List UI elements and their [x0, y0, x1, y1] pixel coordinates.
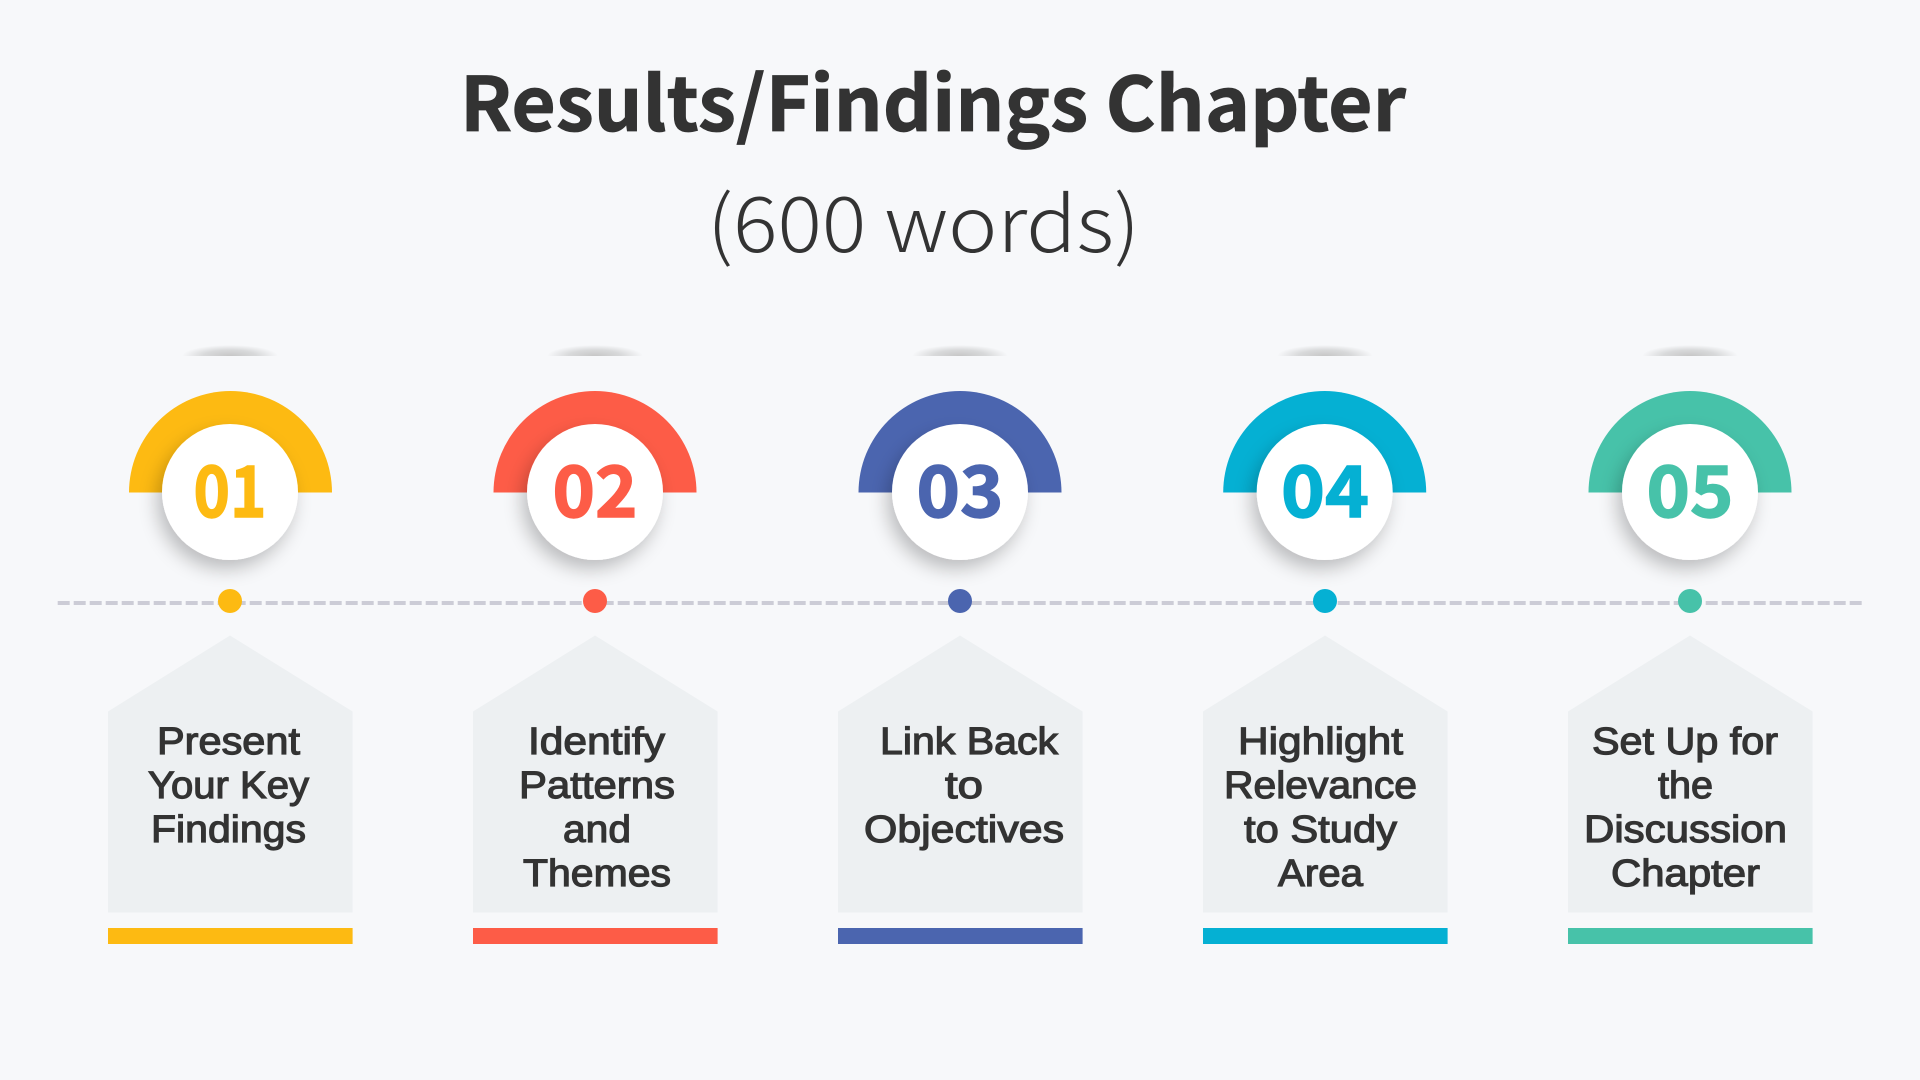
card 5 text: Set Up for [1592, 721, 1778, 763]
card 5 text: Discussion [1584, 809, 1787, 851]
dot 5 [1678, 589, 1702, 613]
dot 3 [948, 589, 972, 613]
card 4 text [1224, 721, 1417, 895]
circle 3 [892, 424, 1028, 560]
card 1 text [148, 721, 309, 851]
arc 3 [858, 391, 1062, 492]
card 3 text: to [945, 765, 983, 807]
card 4 text: to Study [1244, 809, 1397, 851]
number 05: 05 [1646, 436, 1734, 538]
number 03: 03 [916, 436, 1004, 538]
timeline dashed line [58, 601, 1862, 605]
card 4 [1203, 636, 1448, 912]
circle 2 [527, 424, 663, 560]
shadow blob 5 [1648, 346, 1732, 356]
shadow blob 1 [188, 346, 272, 356]
card 5 text [1584, 721, 1787, 895]
card 1 text: Your Key [148, 765, 309, 807]
number 02: 02 [552, 436, 638, 538]
card 1 text: Present [157, 721, 300, 763]
card 2 [473, 636, 718, 912]
title: Results/Findings Chapter [460, 44, 1406, 153]
card 4 text: Highlight [1238, 721, 1403, 763]
card 1 [108, 636, 353, 912]
arc 2 [494, 391, 696, 492]
card 4 text: Relevance [1224, 765, 1417, 807]
dot 1 [218, 589, 242, 613]
bar 3 [838, 928, 1083, 944]
card 2 text: Patterns [519, 765, 675, 807]
circle 5 [1622, 424, 1758, 560]
bar 5 [1568, 928, 1813, 944]
step 4 [1203, 345, 1448, 944]
card 2 text: Themes [523, 853, 671, 895]
card 3 [838, 636, 1083, 912]
arc 1 [129, 391, 332, 492]
step 1 [108, 345, 353, 944]
shadow blob 2 [552, 346, 638, 356]
dot 4 [1313, 589, 1337, 613]
card 2 text: and [563, 809, 631, 851]
card 5 [1568, 636, 1813, 912]
circle 1 [162, 424, 298, 560]
circle 4 [1257, 424, 1393, 560]
card 3 text: Link Back [880, 721, 1059, 763]
step 2 [473, 345, 718, 944]
shadow blob 4 [1282, 346, 1368, 356]
number 04: 04 [1281, 436, 1369, 538]
arc 5 [1588, 391, 1792, 492]
card 2 text [519, 721, 675, 895]
bar 4 [1203, 928, 1448, 944]
card 5 text: Chapter [1611, 853, 1760, 895]
step 5 [1568, 345, 1813, 944]
shadow blob 3 [918, 346, 1002, 356]
card 5 text: the [1658, 765, 1713, 807]
card 2 text: Identify [528, 721, 665, 763]
card 3 text [864, 721, 1064, 851]
card 3 text: Objectives [864, 809, 1064, 851]
bar 1 [108, 928, 353, 944]
subtitle: (600 words) [707, 164, 1140, 275]
arc 4 [1223, 391, 1426, 492]
card 1 text: Findings [151, 809, 306, 851]
number 01: 01 [194, 436, 266, 538]
bar 2 [473, 928, 718, 944]
step 3 [838, 345, 1083, 944]
card 4 text: Area [1278, 853, 1364, 895]
dot 2 [583, 589, 607, 613]
